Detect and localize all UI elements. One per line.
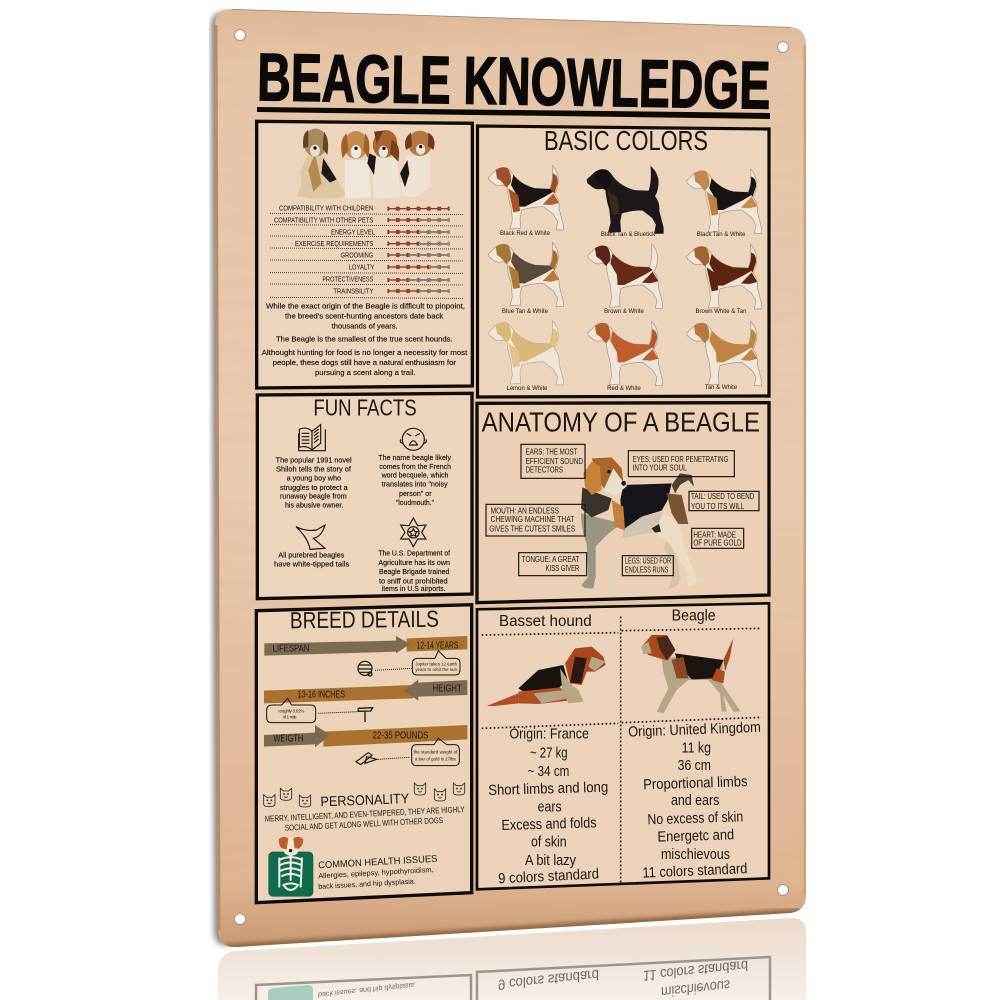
label box: ears (521, 444, 585, 478)
reflection of the sign: 9 colors standard (498, 966, 599, 992)
mounting hole top right (778, 42, 788, 52)
bubble: mile fact (267, 698, 316, 723)
icon: planet (358, 661, 372, 676)
dog: tan and white (687, 321, 762, 386)
color labels: Lemon & White (506, 386, 548, 392)
origin text: people, these dogs still have a natural enthusiasm for (273, 358, 456, 367)
color labels: Black Red & White (500, 231, 551, 237)
origin text: While the exact origin of the Beagle is difficult to pinpoint, (266, 301, 465, 310)
title: BEAGLE KNOWLEDGE (257, 40, 771, 124)
health text: Allergies, epilepsy, hypothyroidism, (318, 865, 434, 880)
origin text: thousands of years. (332, 321, 398, 330)
basset hound facts: ~ 34 cm (528, 764, 569, 780)
beagle facts: 11 kg (682, 740, 711, 756)
trait rating labels: PROTECTIVENESS (322, 275, 373, 284)
fact: name origin: The name beagle likely (378, 453, 451, 462)
fact: beagle brigade: The U.S. Department of (378, 549, 451, 558)
fact: name origin (378, 453, 451, 507)
fact: beagle brigade (378, 549, 451, 593)
illustration: beagle (641, 635, 741, 713)
color labels: Red & White (607, 386, 641, 392)
label box: legs: LEGS: USED FOR (625, 556, 671, 566)
fact: novel Shiloh: runaway beagle from (280, 492, 347, 501)
label box: ears: EARS: THE MOST (526, 446, 577, 456)
beagle facts: Energetc and (657, 827, 734, 846)
fact: novel Shiloh: The popular 1991 novel (276, 455, 352, 464)
fact: name origin: translates into "noisy (382, 480, 448, 489)
basset hound facts: ~ 27 kg (530, 745, 568, 761)
bubble: gold fact (412, 738, 459, 766)
label box: heart (692, 528, 744, 548)
color labels: Black Tan & White (697, 232, 746, 238)
panel: breed details (256, 605, 472, 903)
trait rating labels: GROOMING (341, 251, 373, 260)
beagle facts: 11 colors standard (642, 861, 748, 882)
metal sign plate (205, 0, 815, 950)
mounting hole bottom right (778, 884, 788, 896)
beagle facts: 36 cm (678, 758, 711, 774)
bubble: mile fact: of 1 mile (283, 715, 297, 720)
bone rating icons (387, 207, 450, 293)
label box: tail: YOU TO ITS WILL (691, 501, 745, 511)
dog: black tan and bluetick (588, 168, 663, 233)
heading: BREED DETAILS (290, 606, 439, 633)
reflection of the sign (218, 918, 806, 1000)
fact: novel Shiloh (276, 455, 352, 509)
health heading: COMMON HEALTH ISSUES (318, 854, 438, 871)
fact: beagle brigade: Agriculture has its own (378, 558, 450, 567)
panel frame (257, 393, 472, 599)
bar: height: HEIGHT (433, 684, 462, 695)
panel: anatomy of a beagle (477, 403, 769, 603)
trait rating labels: LOYALTY (349, 263, 374, 272)
icon: whale-like tail (296, 525, 325, 549)
personality text (265, 804, 465, 833)
bar: lifespan: LIFESPAN (273, 644, 309, 655)
dog: brown and white (588, 244, 663, 308)
heading: BASIC COLORS (544, 125, 708, 156)
panel: breed overview (257, 121, 472, 388)
health text (318, 865, 434, 891)
icon: sheriff star (401, 518, 426, 547)
icon: gold bars (356, 753, 377, 765)
fact: novel Shiloh: struggles to protect a (280, 483, 348, 492)
bubble: gold fact: a bar of gold is 27lbs (415, 756, 456, 761)
fact: white-tipped tails: All purebred beagles (278, 551, 344, 560)
photo: four beagle puppies (297, 127, 435, 199)
label box: tongue (519, 553, 587, 576)
illustration: basset hound (487, 647, 606, 706)
panel: fun facts (257, 393, 472, 599)
trait rating labels: COMPATIBILITY WITH CHILDREN (279, 204, 373, 213)
bar: weight (264, 725, 467, 747)
icon: hammer (358, 708, 373, 722)
beagle facts (628, 720, 761, 882)
dog: red and white (588, 321, 663, 386)
personality heading: PERSONALITY (320, 790, 410, 809)
icons: cat faces (264, 783, 465, 807)
beagle facts: Proportional limbs (643, 774, 748, 793)
trait rating labels (274, 204, 375, 295)
color labels: Blue Tan & White (502, 309, 549, 315)
color labels (500, 231, 746, 392)
reflection of the sign: 11 colors standard (643, 956, 748, 983)
personality text: MERRY, INTELLIGENT, AND EVEN-TEMPERED, THEY ARE HIGHLY (265, 804, 465, 824)
column heading: beagle: Beagle (672, 608, 716, 625)
panel frame (257, 121, 472, 388)
fact: novel Shiloh: a young boy who (287, 474, 341, 483)
basset hound facts (488, 726, 608, 887)
color labels: Black Tan & Bluetick (601, 232, 656, 238)
personality text: SOCIAL AND GET ALONG WELL WITH OTHER DOGS (285, 815, 444, 833)
panel: basset hound vs beagle (477, 603, 769, 889)
label box: eyes: EYES: USED FOR PENETRATING (633, 454, 728, 464)
basset hound facts: Short limbs and long (488, 780, 608, 799)
basset hound facts: ears (538, 800, 562, 816)
dog: brown white and tan (687, 245, 762, 309)
color labels: Tan & White (705, 385, 738, 391)
trait rating labels: COMPATIBILITY WITH OTHER PETS (274, 215, 373, 224)
label box: legs (622, 556, 673, 576)
bubble: mile fact: roughly 0.02% (278, 708, 304, 713)
origin text: the breed's scent-hunting ancestors date back (285, 311, 443, 320)
reflection of the sign: mischievous (661, 976, 730, 999)
trait rating labels: ENERGY LEVEL (331, 227, 375, 236)
origin text (262, 301, 468, 377)
panel frame (256, 605, 472, 903)
fact: novel Shiloh: his abusive owner. (285, 500, 343, 509)
beagle facts: Origin: United Kingdom (628, 720, 761, 741)
bar: height (264, 679, 467, 703)
column heading: basset hound: Basset hound (499, 613, 592, 630)
label box: ears: EFFICIENT SOUND (526, 456, 583, 466)
fact: name origin: "loudmouth." (396, 498, 434, 507)
label box: eyes (628, 451, 734, 477)
panel frame (477, 403, 769, 603)
basset hound facts: A bit lazy (525, 853, 577, 869)
heading: ANATOMY OF A BEAGLE (482, 407, 760, 438)
bubble: gold fact: the standard weight of (414, 750, 458, 755)
panel frame (477, 603, 769, 889)
bar: height: 13-16 INCHES (298, 689, 345, 700)
label box: mouth (486, 504, 585, 536)
label box: mouth: MOUTH: AN ENDLESS (491, 505, 559, 515)
basset hound facts: Excess and folds (501, 815, 597, 834)
label box: tail: TAIL: USED TO BEND (691, 491, 754, 501)
bar: lifespan (264, 636, 467, 656)
bubble: jupiter fact (412, 651, 460, 675)
label box: mouth: CHEWING MACHINE THAT (491, 514, 574, 524)
bar: lifespan: 12-14 YEARS (417, 640, 458, 651)
fact: novel Shiloh: Shiloh tells the story of (276, 465, 352, 474)
title rule (257, 107, 770, 119)
label box: ears: DETECTORS (526, 465, 563, 475)
color labels: Brown White & Tan (696, 309, 746, 315)
origin text: pursuing a scent along a trail. (315, 368, 416, 377)
icon: dog x-ray skeleton (268, 837, 313, 897)
health text: back issues, and hip dysplasia. (318, 877, 416, 891)
reflection of the sign: back issues, and hip dysplasia. (318, 981, 416, 1000)
dog: lemon and white (488, 321, 563, 385)
label box: tongue: KISS GIVER (546, 563, 579, 573)
dog: black tan and white (687, 169, 762, 233)
fact: name origin: person" or (399, 489, 432, 498)
fact: name origin: comes from the French (379, 462, 451, 471)
beagle facts: No excess of skin (647, 809, 743, 828)
beagle facts: mischievous (661, 847, 730, 863)
anatomy dog illustration (581, 457, 698, 593)
mounting hole bottom left (234, 914, 246, 924)
trait rating labels: EXERCISE REQUIREMENTS (295, 239, 373, 248)
icon: open book (299, 425, 325, 451)
color labels: Brown & White (604, 309, 644, 315)
dog: black red and white (488, 166, 563, 230)
trait rating labels: TRAINSBILITY (333, 286, 373, 295)
fact: white-tipped tails (274, 551, 349, 569)
bubble: jupiter fact: years to orbit the sun (415, 667, 458, 672)
label box: tail (689, 491, 759, 511)
beagle facts: and ears (671, 793, 719, 809)
bubble: jupiter fact: Jupiter takes 12 earth (415, 661, 458, 666)
fact: white-tipped tails: have white-tipped tails (274, 560, 349, 569)
mounting hole top left (234, 30, 246, 40)
label box: eyes: INTO YOUR SOUL (633, 463, 687, 473)
basset hound facts: 9 colors standard (498, 866, 599, 887)
label box: mouth: GIVES THE CUTEST SMILES (489, 524, 575, 534)
heading: FUN FACTS (313, 395, 417, 421)
sign shadow (211, 12, 230, 945)
fact: beagle brigade: Beagle Brigade trained (379, 567, 449, 576)
label box: heart: OF PURE GOLD (693, 538, 742, 548)
label box: legs: ENDLESS RUNS (625, 564, 669, 574)
bar: weight: 22-35 POUNDS (373, 730, 428, 741)
bar: weight: WEIGTH (273, 733, 303, 744)
origin text: Althought hunting for food is no longer a necessity for most (262, 348, 468, 357)
origin text: The Beagle is the smallest of the true scent hounds. (276, 335, 453, 344)
panel: basic colors (478, 125, 769, 397)
fact: beagle brigade: items in U.S airports. (382, 584, 446, 593)
panel frame (478, 126, 769, 397)
label box: tongue: TONGUE: A GREAT (522, 554, 579, 564)
dog: blue tan and white (488, 242, 563, 307)
icon: crying face (400, 428, 426, 450)
basset hound facts: Origin: France (509, 726, 589, 742)
basset hound facts: of skin (531, 835, 567, 851)
fact: beagle brigade: to sniff out prohibited (379, 576, 448, 585)
label box: heart: HEART: MADE (693, 529, 736, 539)
fact: name origin: word becquele, which (381, 470, 448, 479)
